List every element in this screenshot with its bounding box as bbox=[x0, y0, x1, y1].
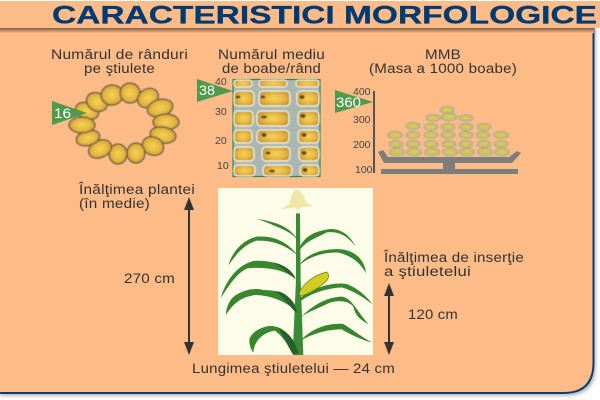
heading: rows per ear: pe ştiulete bbox=[84, 61, 155, 76]
label: plant height: Înălţimea plantei bbox=[78, 182, 195, 197]
label: ear length: Lungimea ştiuletelui — 24 cm bbox=[192, 361, 395, 376]
marker: 38 bbox=[197, 79, 233, 102]
title: CARACTERISTICI MORFOLOGICE bbox=[52, 2, 597, 30]
marker: 360 bbox=[335, 90, 373, 113]
arrow: plant height bbox=[184, 197, 194, 355]
heading: kernels per row bbox=[218, 47, 325, 76]
label: ear insertion height bbox=[383, 250, 524, 279]
heading: rows per ear bbox=[51, 47, 188, 76]
axis labels: kernels per row bbox=[215, 76, 229, 172]
heading: thousand kernel mass: MMB bbox=[425, 47, 461, 62]
heading: thousand kernel mass bbox=[369, 47, 517, 76]
marker: 38: 38 bbox=[199, 83, 215, 98]
axis labels: kernels per row: 30 bbox=[215, 106, 227, 118]
heading: rows per ear: Numărul de rânduri bbox=[51, 47, 188, 62]
label: plant height: (în medie) bbox=[79, 196, 150, 211]
label: ear insertion height: Înălţimea de inserţie bbox=[383, 250, 524, 265]
axis labels: mass bbox=[353, 86, 375, 176]
corn plant illustration bbox=[218, 188, 373, 355]
axis labels: mass: 400 bbox=[353, 86, 371, 98]
marker: 16: 16 bbox=[54, 105, 71, 121]
value: plant height: 270 cm bbox=[124, 271, 175, 286]
label: plant height bbox=[78, 182, 195, 211]
label: ear insertion height: a ştiuletelui bbox=[384, 264, 471, 279]
marker: 360: 360 bbox=[336, 95, 361, 110]
heading: kernels per row: de boabe/rând bbox=[222, 61, 321, 76]
scale with kernels bbox=[378, 106, 521, 174]
axis labels: mass: 100 bbox=[355, 164, 373, 176]
axis labels: kernels per row: 10 bbox=[217, 160, 229, 172]
kernel grid bbox=[233, 80, 320, 176]
kernel ring bbox=[69, 83, 179, 164]
heading: kernels per row: Numărul mediu bbox=[218, 47, 325, 62]
axis labels: kernels per row: 40 bbox=[215, 76, 227, 88]
arrow: ear insertion height bbox=[384, 283, 394, 355]
heading: thousand kernel mass: (Masa a 1000 boabe) bbox=[369, 61, 517, 76]
axis labels: mass: 200 bbox=[353, 139, 371, 151]
axis labels: mass: 300 bbox=[353, 114, 371, 126]
value: ear insertion height: 120 cm bbox=[408, 307, 458, 322]
header band bbox=[0, 1, 600, 33]
marker: 16 bbox=[52, 101, 87, 125]
axis labels: kernels per row: 20 bbox=[215, 135, 227, 147]
